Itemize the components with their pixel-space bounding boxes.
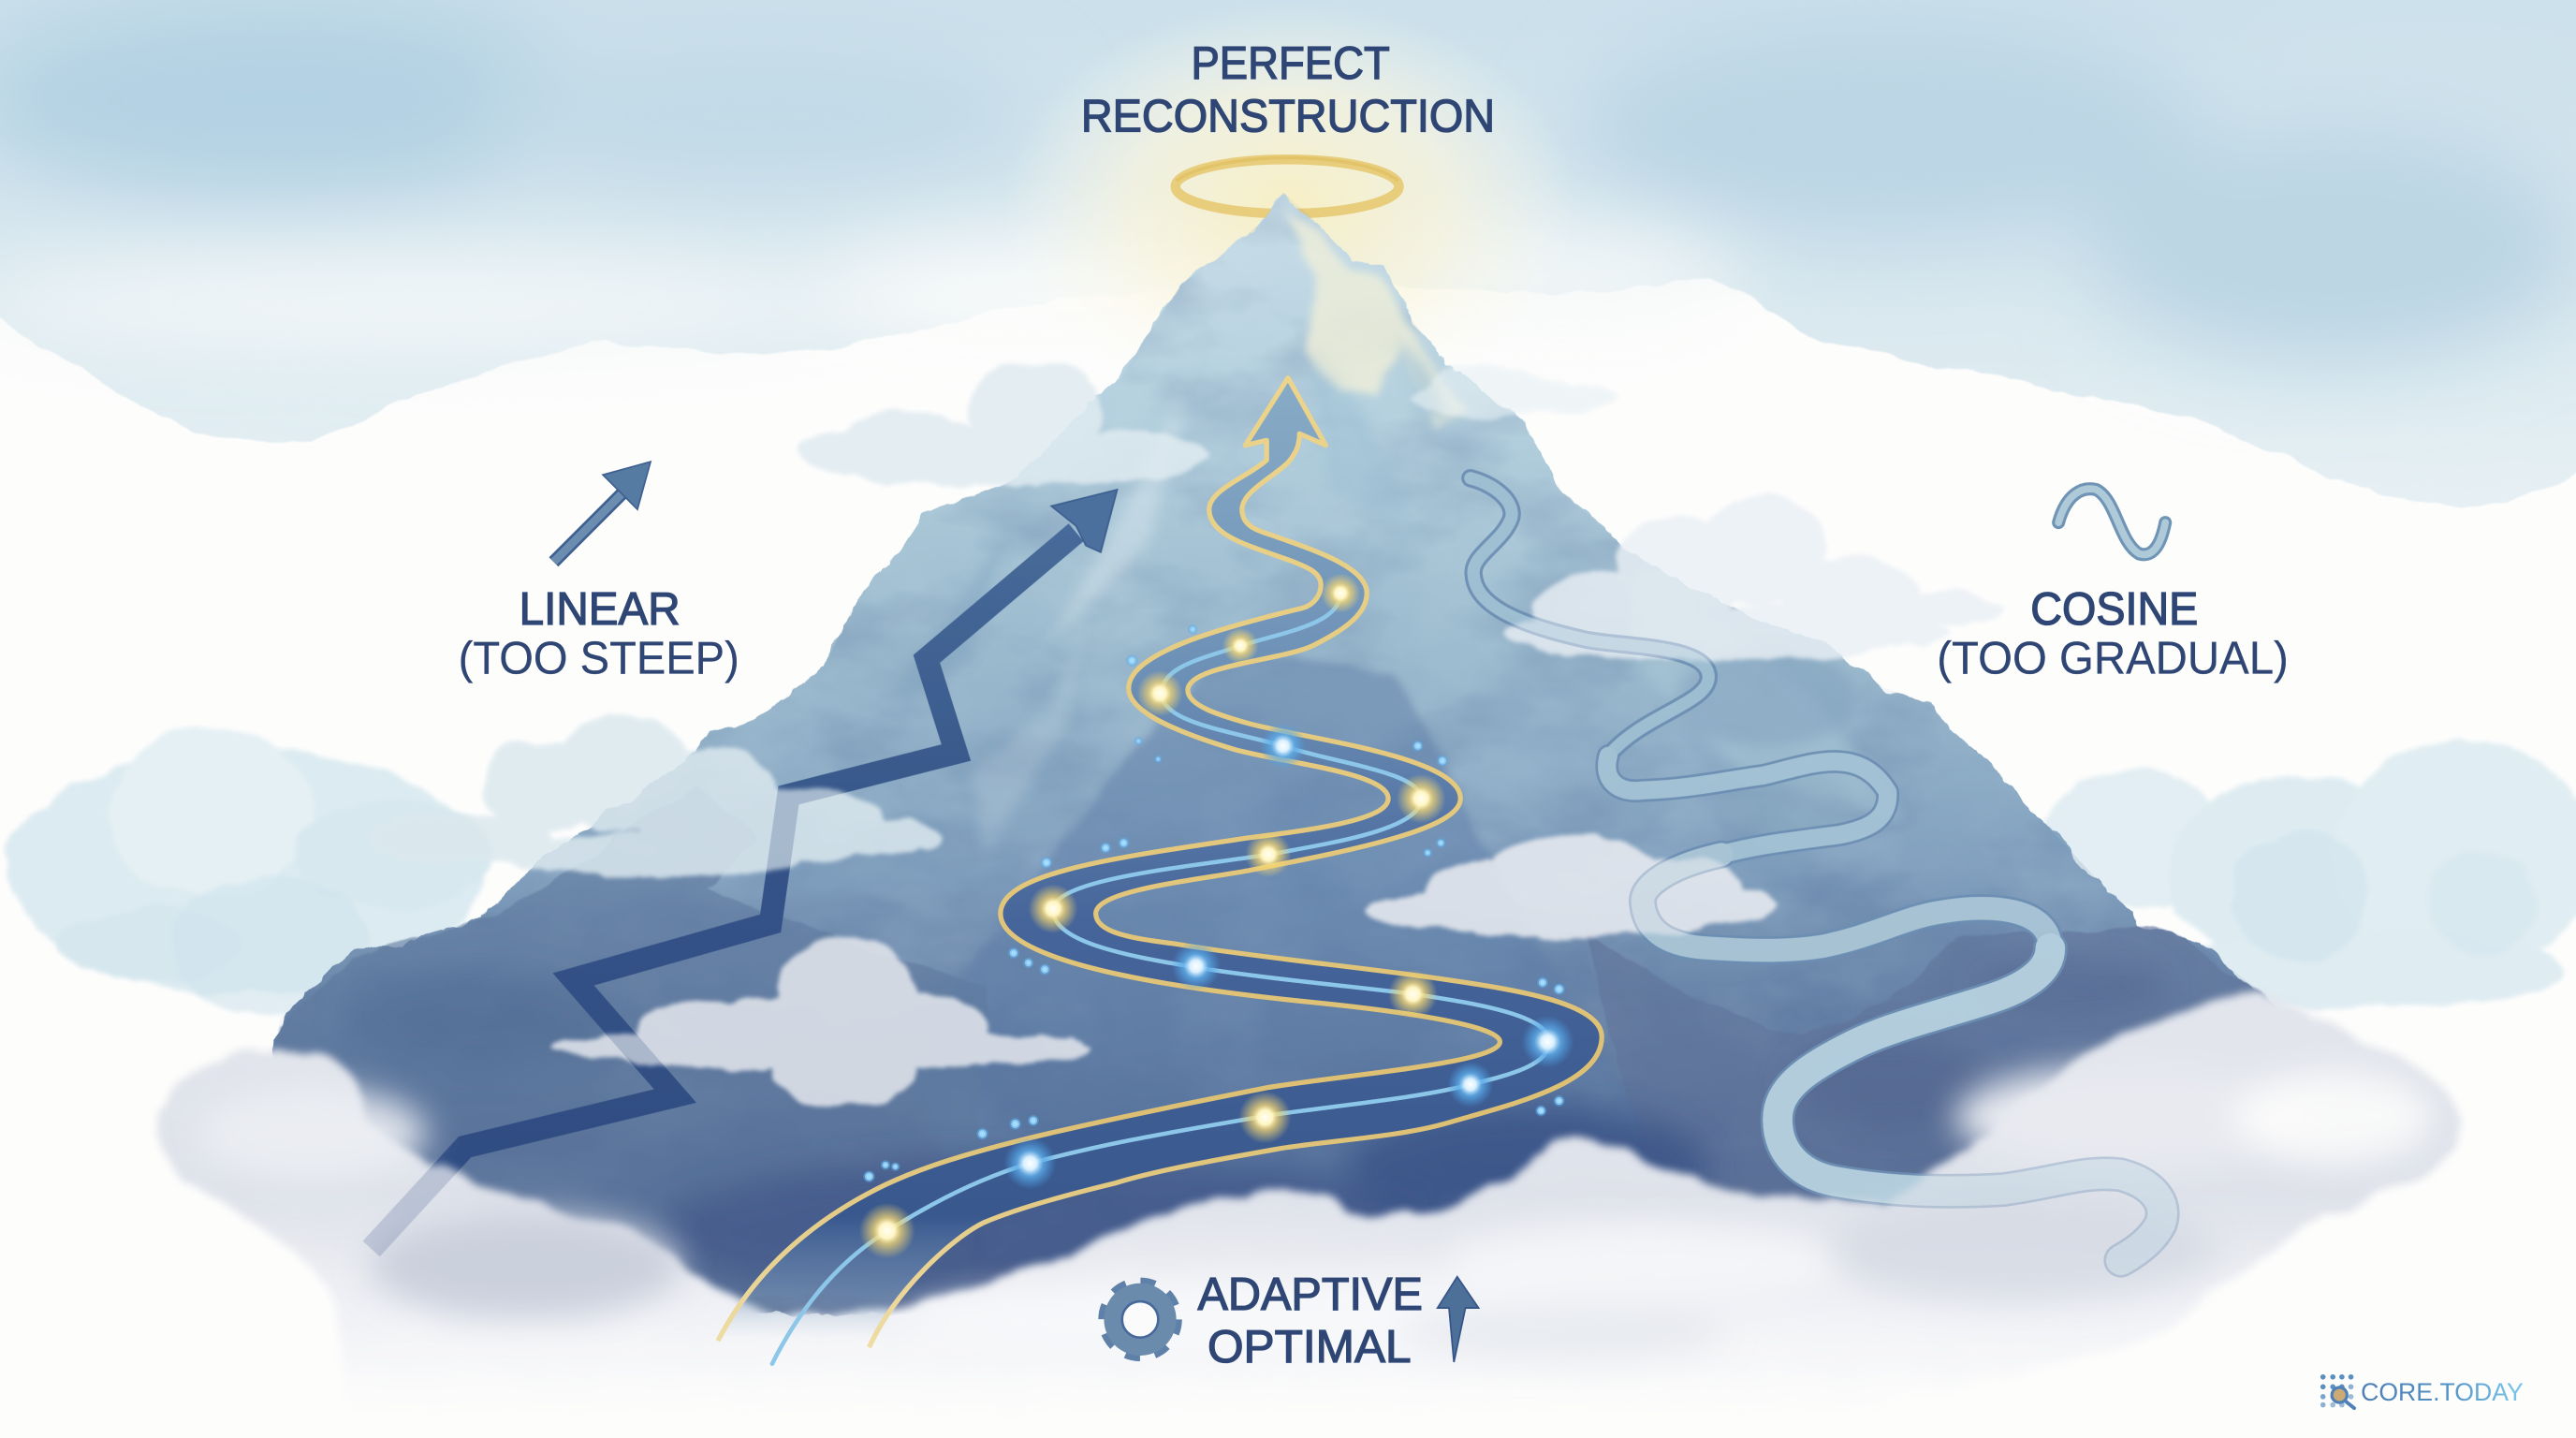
label: cosine too gradual: COSINE: [2030, 584, 2198, 635]
panel: foreground cloud bank: [156, 994, 2465, 1438]
cloud: right shoulder: [1503, 496, 2001, 661]
watercolor mottling: [246, 192, 2317, 1314]
lower-left dark slope: [246, 785, 986, 1299]
label: adaptive optimal: OPTIMAL: [1208, 1322, 1412, 1372]
deep shadows: [345, 956, 2169, 1308]
arrow: cosine route seen through clouds: [1471, 478, 2162, 1260]
icon: linear arrow: [553, 462, 651, 562]
panel: watercolor sky: [0, 0, 2576, 506]
right side cloud: [2045, 740, 2576, 1009]
label: adaptive optimal: ADAPTIVE: [1197, 1269, 1423, 1320]
arrow: linear zigzag route: [372, 490, 1117, 1249]
panel: mountain: [246, 192, 2317, 1314]
left side cloud: [7, 728, 493, 1014]
cloud: right middle: [1368, 835, 1775, 936]
cloud: left lower: [550, 936, 1092, 1108]
heading: perfect reconstruction: PERFECT: [1191, 38, 1390, 89]
sunlit right face of the peak: [1286, 205, 1471, 431]
chart: adaptive optimal golden route: [718, 378, 1602, 1364]
ridge streaks: [887, 337, 1906, 855]
cloud: upper right wisp: [1406, 365, 1617, 416]
route band: [718, 378, 1602, 1347]
icon: cosine wave: [2058, 489, 2165, 554]
arrow: cosine winding route: [1471, 478, 2162, 1260]
cloud: upper left: [795, 363, 1203, 487]
center light line: [772, 594, 1549, 1364]
summit glow: [1003, 0, 1577, 411]
icon: golden halo: [1176, 157, 1398, 213]
arrow: linear route seen through clouds: [372, 490, 1117, 1249]
logo: core.today: [2320, 1374, 2524, 1408]
label: cosine too gradual: (TOO GRADUAL): [1937, 634, 2289, 684]
panel: drifting mid-level clouds: [370, 363, 2001, 1108]
label: linear too steep: (TOO STEEP): [459, 634, 739, 684]
logo: core.today: CORE.TODAY: [2361, 1378, 2524, 1406]
central dark buttress: [912, 649, 1692, 1265]
sparkle dots: [865, 626, 1563, 1181]
middle bank: [657, 1137, 1889, 1438]
heading: perfect reconstruction: RECONSTRUCTION: [1081, 91, 1495, 141]
icon: gear: [1105, 1284, 1175, 1354]
golden nodes: [859, 574, 1445, 1258]
right bank: [1791, 994, 2465, 1413]
icon: up arrow: [1438, 1277, 1479, 1362]
left bank: [156, 1049, 855, 1430]
lower-right dark slope: [1584, 925, 2308, 1299]
label: linear too steep: LINEAR: [520, 584, 681, 635]
panel: distant side clouds: [7, 728, 2576, 1014]
blue nodes: [1003, 723, 1573, 1190]
cloud: left upper: [370, 713, 940, 877]
